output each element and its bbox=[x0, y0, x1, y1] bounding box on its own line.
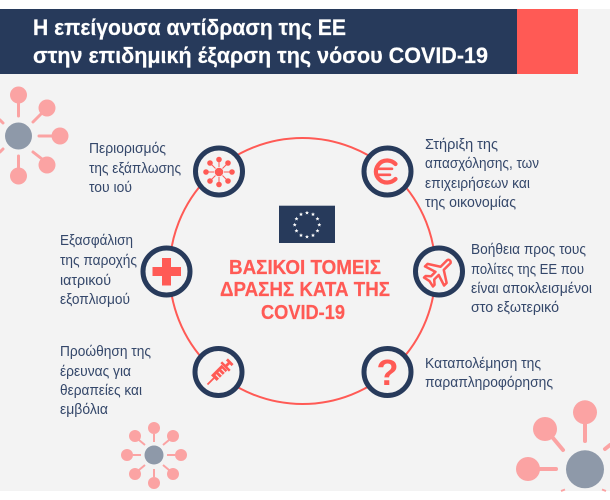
text: medical equipment: ιατρικού bbox=[60, 273, 111, 289]
text: supporting jobs: απασχόλησης, των bbox=[425, 156, 539, 172]
decoration: virus top left bbox=[0, 86, 68, 184]
text: fighting disinformation: Καταπολέμηση της bbox=[425, 356, 541, 372]
centre heading: COVID-19 bbox=[261, 301, 345, 324]
centre heading bbox=[220, 256, 390, 324]
text: research: θεραπείες και bbox=[60, 383, 142, 399]
text: fighting disinformation bbox=[425, 356, 553, 391]
header red block bbox=[517, 9, 578, 74]
text: medical equipment bbox=[60, 233, 137, 308]
text: research bbox=[60, 344, 151, 418]
text: helping stranded citizens: πολίτες της ΕΕ που bbox=[471, 262, 584, 278]
central ring line bbox=[170, 138, 436, 404]
text: supporting jobs bbox=[425, 137, 539, 211]
icon: containing the virus bbox=[196, 148, 242, 195]
EU flag bbox=[279, 206, 335, 243]
text: research: Προώθηση της bbox=[60, 344, 151, 360]
title: Η επείγουσα αντίδραση της ΕΕ bbox=[33, 15, 346, 40]
text: medical equipment: εξοπλισμού bbox=[60, 292, 130, 308]
text: helping stranded citizens: στο εξωτερικό bbox=[471, 300, 559, 316]
text: limiting the spread: της εξάπλωσης bbox=[89, 161, 181, 177]
text: research: έρευνας για bbox=[60, 364, 131, 380]
icon: question mark bbox=[364, 348, 411, 396]
text: helping stranded citizens: Βοήθεια προς τους bbox=[471, 242, 586, 258]
centre heading: ΔΡΑΣΗΣ ΚΑΤΑ ΤΗΣ bbox=[220, 278, 390, 301]
title: στην επιδημική έξαρση της νόσου COVID-19 bbox=[33, 43, 488, 68]
icon: syringe bbox=[195, 348, 242, 396]
text: limiting the spread: Περιορισμός bbox=[89, 141, 166, 157]
icon: euro bbox=[364, 148, 411, 195]
decoration: virus bottom right bbox=[516, 400, 610, 491]
text: supporting jobs: της οικονομίας bbox=[425, 195, 516, 211]
text: medical equipment: Εξασφάλιση bbox=[60, 233, 133, 249]
text: limiting the spread: του ιού bbox=[89, 180, 132, 196]
icon: plane bbox=[416, 248, 462, 295]
header banner bbox=[0, 9, 578, 74]
text: helping stranded citizens bbox=[471, 242, 592, 316]
title bbox=[33, 15, 488, 68]
text: fighting disinformation: παραπληροφόρησης bbox=[425, 375, 553, 391]
icon: medical cross bbox=[143, 248, 190, 295]
centre heading: ΒΑΣΙΚΟΙ ΤΟΜΕΙΣ bbox=[229, 256, 381, 279]
icon: question mark: ? bbox=[376, 352, 398, 393]
text: medical equipment: της παροχής bbox=[60, 253, 137, 269]
header navy bar bbox=[0, 9, 517, 74]
text: research: εμβόλια bbox=[60, 402, 108, 418]
text: supporting jobs: επιχειρήσεων και bbox=[425, 176, 530, 192]
text: supporting jobs: Στήριξη της bbox=[425, 137, 498, 153]
text: helping stranded citizens: είναι αποκλεισμένοι bbox=[471, 281, 592, 297]
decoration: virus bottom centre bbox=[121, 422, 187, 489]
text: limiting the spread bbox=[89, 141, 181, 196]
